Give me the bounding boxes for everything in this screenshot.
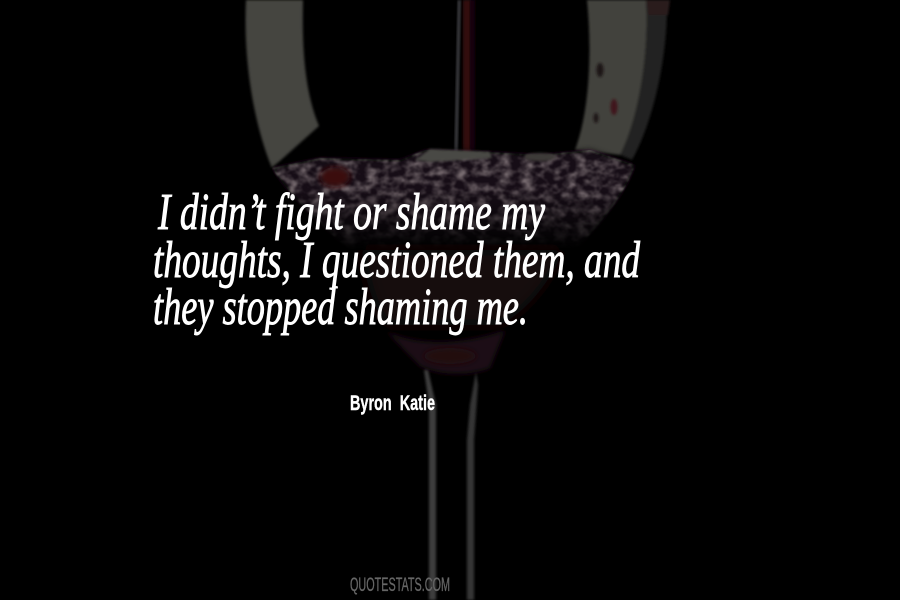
glass rim: left crescent	[246, 0, 319, 168]
background photo: wine glass	[246, 0, 670, 600]
wine stream	[454, 0, 475, 168]
glass rim: right crescent	[575, 0, 670, 160]
quote line 1: I didn’t fight or shame my	[157, 184, 546, 241]
wine drops on glass	[594, 63, 618, 123]
quote text	[153, 184, 641, 336]
author name: Byron Katie	[350, 392, 435, 415]
crushed ice and wine	[272, 149, 635, 250]
glass stem	[424, 370, 478, 600]
quote line 3: they stopped shaming me.	[153, 279, 528, 336]
watermark: QUOTESTATS.COM	[350, 575, 450, 596]
lower bowl of glass	[360, 250, 565, 374]
quote line 2: thoughts, I questioned them, and	[153, 232, 641, 289]
